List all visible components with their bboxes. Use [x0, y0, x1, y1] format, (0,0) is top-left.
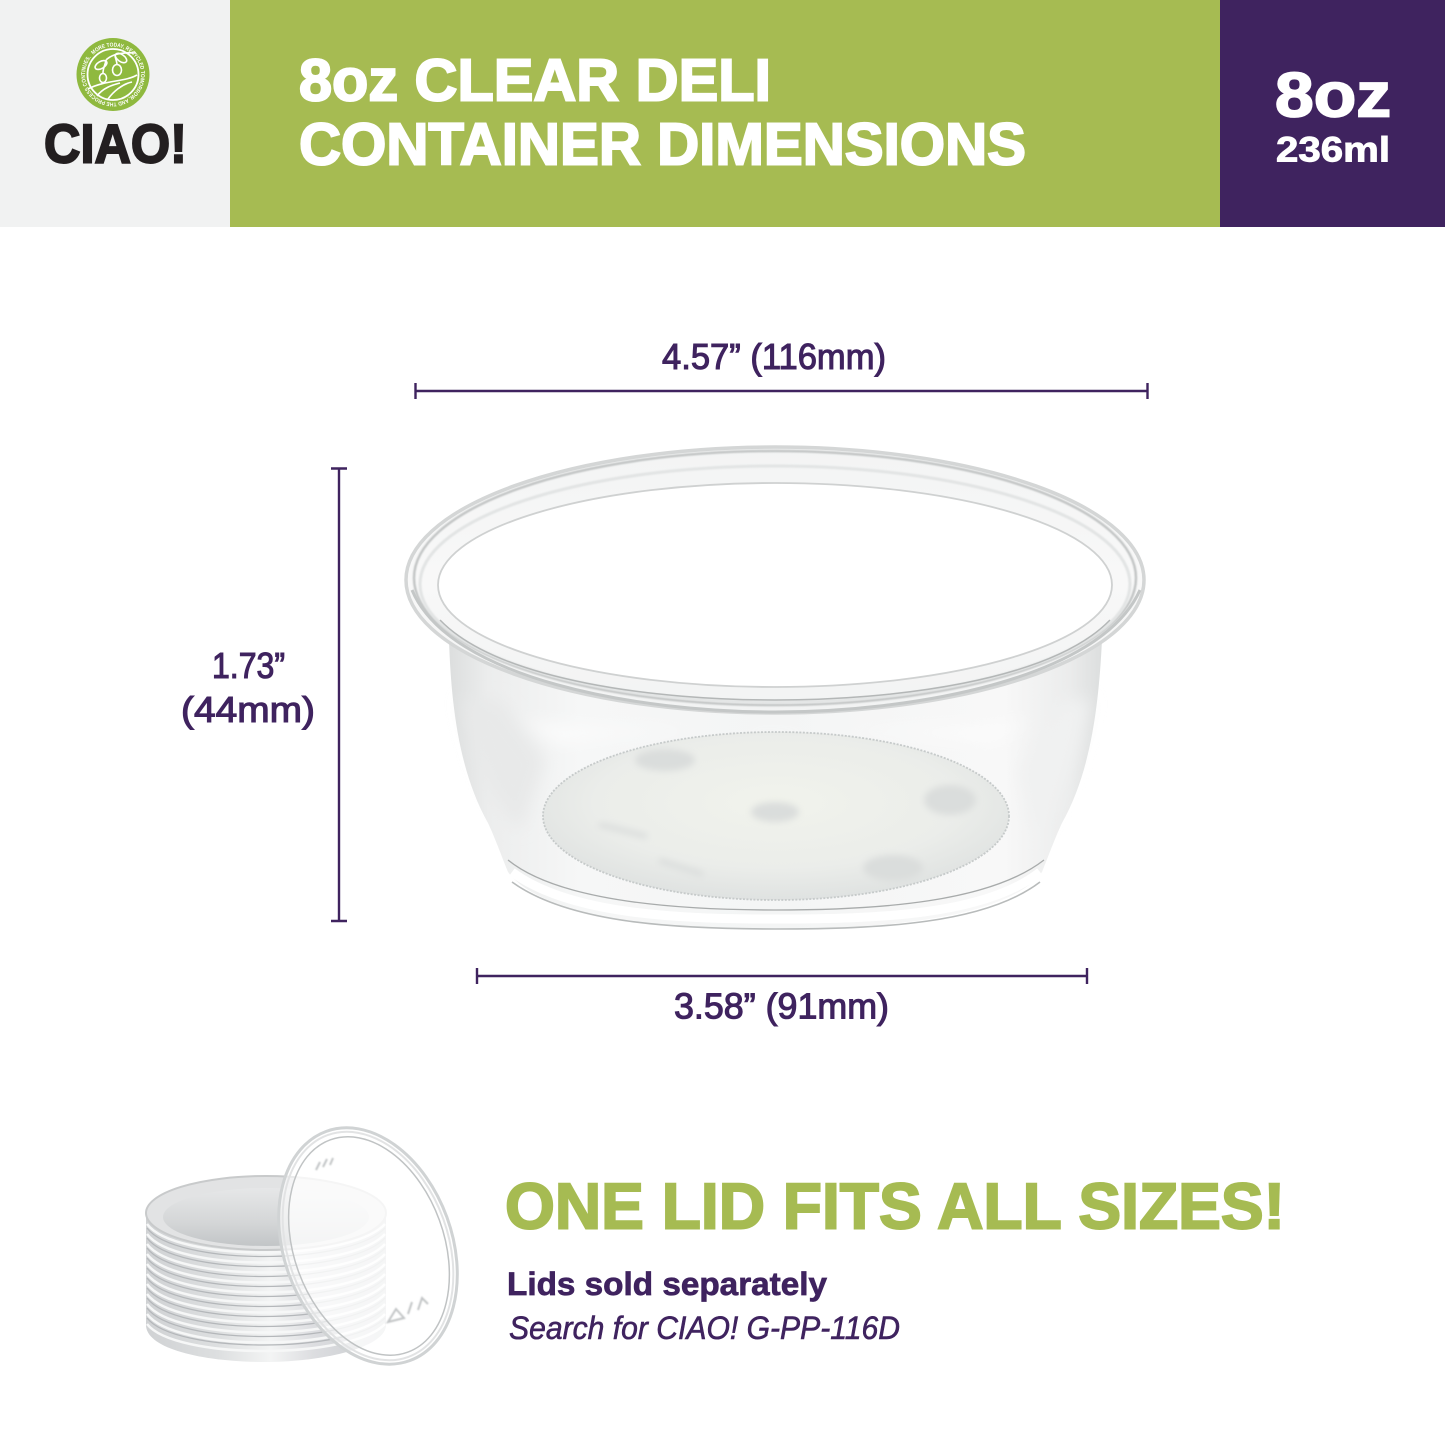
container foot ring [508, 860, 1044, 929]
container wall shading [462, 700, 1090, 835]
header: title panel [230, 0, 1220, 227]
dimension: base width: 3.58” (91mm) [674, 986, 889, 1026]
title [299, 48, 1026, 178]
dimension: top width [416, 336, 1148, 399]
dimension: top width: 4.57” (116mm) [662, 336, 886, 377]
icon: olive branch seal: MORE TODAY, RECYCLED TOMORROW, AND THE PROCESS CONTINUES. [81, 42, 145, 106]
dimension: height [181, 468, 347, 921]
container base disc [543, 732, 1009, 900]
title: 8oz CLEAR DELI [299, 48, 771, 114]
capacity ml: 236ml [1276, 130, 1390, 170]
dimension: height: (44mm) [181, 689, 315, 730]
title: CONTAINER DIMENSIONS [299, 112, 1026, 178]
logo wordmark: CIAO! [44, 112, 187, 174]
container photo illustration [406, 447, 1144, 929]
header: capacity panel [1220, 0, 1445, 227]
lids illustration [146, 1103, 489, 1389]
base embossed marks [598, 749, 976, 881]
stacked lid edges [147, 1224, 385, 1351]
container body [449, 640, 1102, 929]
lid note: Lids sold separately [507, 1266, 827, 1302]
dimension: height: 1.73” [212, 645, 285, 686]
lid stack [146, 1176, 386, 1362]
header: logo panel [0, 0, 230, 227]
container rim [406, 447, 1144, 713]
lid embossed marks [316, 1158, 428, 1322]
lid headline: ONE LID FITS ALL SIZES! [505, 1170, 1285, 1242]
capacity oz: 8oz [1275, 60, 1391, 130]
lid note: Search for CIAO! G-PP-116D [509, 1310, 900, 1346]
lid note [507, 1266, 900, 1346]
leaning lid [247, 1103, 489, 1389]
dimension: base width [477, 968, 1087, 1026]
